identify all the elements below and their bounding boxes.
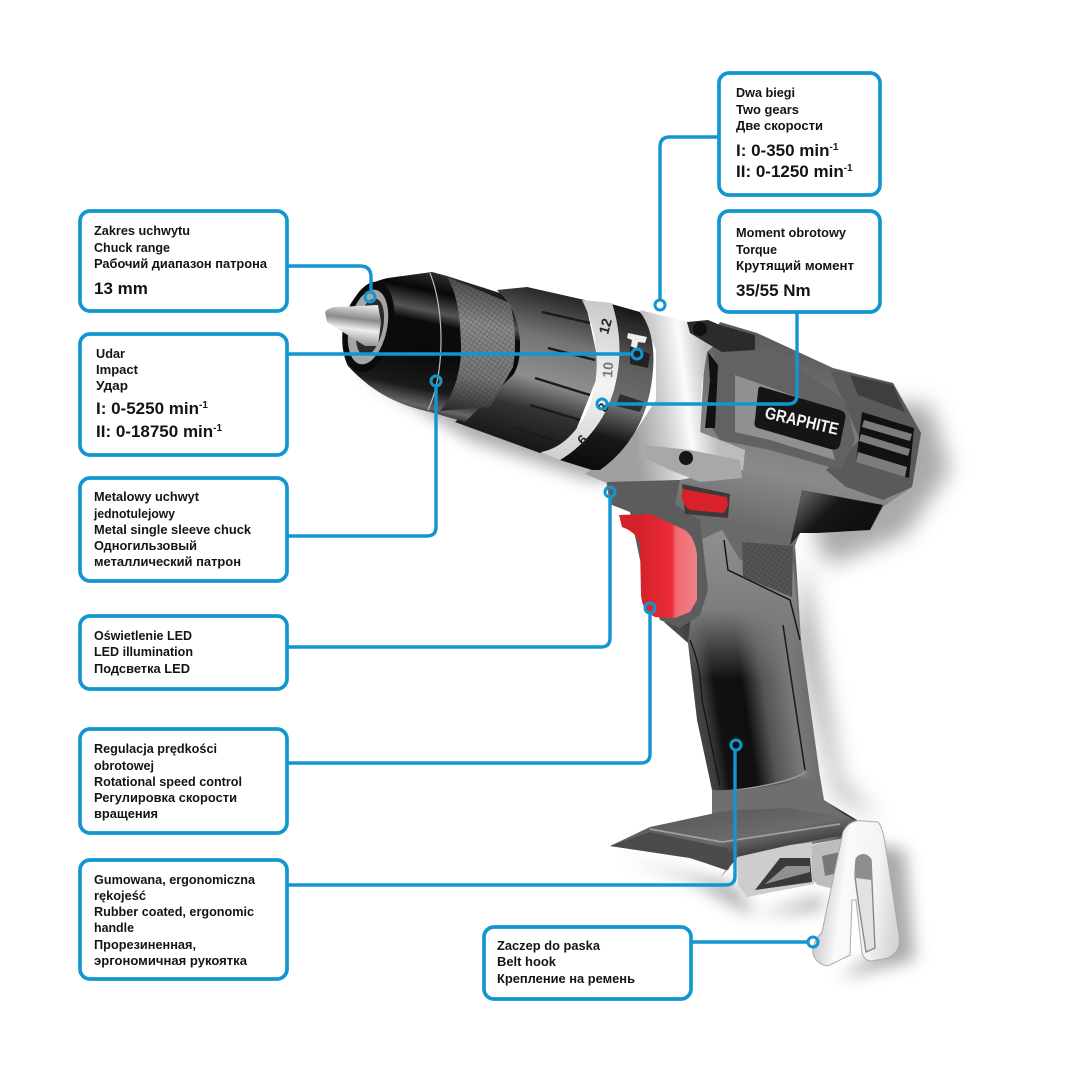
logo: GRAPHITE: [763, 403, 840, 439]
panel: impact: -1: [199, 400, 208, 411]
connector: torque: [607, 312, 797, 404]
panel: speed control: Regulacja prędkości: [94, 741, 217, 756]
panel: impact: Impact: [96, 362, 139, 377]
connector: handle: [287, 751, 735, 885]
second collar: [560, 303, 653, 470]
T mark and slots: [616, 333, 650, 412]
ring numbers: 6: [574, 431, 591, 448]
chuck: [342, 272, 520, 422]
panel: torque: Крутящий момент: [736, 258, 854, 273]
lower screw mount: [645, 445, 742, 482]
upper screw mount: [687, 320, 755, 352]
panel: two gears: -1: [844, 163, 853, 174]
panel: torque: Torque: [736, 242, 777, 257]
panel: impact: Удар: [96, 378, 128, 393]
panel: two gears: Две скорости: [736, 118, 823, 133]
panel: LED illumination: [80, 616, 287, 689]
panel: two gears: II: 0-1250 min: [736, 162, 844, 181]
panel: impact: Udar: [96, 346, 125, 361]
panel: ergonomic handle: Прорезиненная,: [94, 937, 196, 952]
panel: belt hook: [484, 927, 691, 999]
connector: metal chuck: [287, 386, 436, 536]
hook slot: [855, 855, 875, 952]
panel: speed control: Регулировка скорости: [94, 790, 237, 805]
panel: LED illumination: LED illumination: [94, 644, 193, 659]
silver housing: [585, 310, 745, 483]
belt hook: [813, 821, 899, 966]
panel: impact: II: 0-18750 min: [96, 422, 213, 441]
drill bit: [325, 305, 381, 346]
grip texture: [742, 542, 793, 597]
connector: speed control: [287, 613, 650, 763]
connector: LED: [287, 497, 610, 647]
battery base: [610, 808, 857, 878]
panel: ergonomic handle: rękojeść: [94, 888, 146, 903]
panel: belt hook: Belt hook: [497, 954, 557, 969]
panel: chuck range: 13 mm: [94, 279, 148, 298]
panel: two gears: Two gears: [736, 102, 799, 117]
rear dark section: [790, 490, 883, 545]
knurled grip: [440, 277, 515, 411]
upper handle: [688, 530, 807, 680]
panel: ergonomic handle: Rubber coated, ergonomic: [94, 904, 254, 919]
vents: [856, 412, 914, 478]
panel: speed control: [80, 729, 287, 833]
drill shadow: [360, 372, 950, 978]
handle collar: [712, 776, 857, 838]
ring numbers: [574, 316, 616, 448]
panel: speed control: вращения: [94, 806, 158, 821]
panel: ergonomic handle: [80, 860, 287, 979]
panel: chuck range: Chuck range: [94, 240, 170, 255]
connector: impact: [287, 352, 632, 356]
panel: LED illumination: Oświetlenie LED: [94, 628, 192, 643]
panel: chuck range: [80, 211, 287, 311]
panel: metal sleeve chuck: jednotulejowy: [93, 506, 176, 521]
trigger: [619, 514, 697, 618]
panel: torque: 35/55 Nm: [736, 281, 811, 300]
panel: two gears: -1: [830, 142, 839, 153]
panel: chuck range: Zakres uchwytu: [94, 223, 190, 238]
panel: torque: Moment obrotowy: [736, 225, 847, 240]
connector: two gears: [660, 137, 719, 300]
panel: ergonomic handle: эргономичная рукоятка: [94, 953, 248, 968]
panel: torque: [719, 211, 880, 312]
ring numbers: 12: [595, 316, 615, 336]
panel: metal sleeve chuck: Metalowy uchwyt: [94, 489, 200, 504]
main body: [606, 322, 921, 622]
panel: speed control: Rotational speed control: [94, 774, 242, 789]
badge: [754, 387, 845, 450]
handle lines: [690, 540, 806, 792]
side panel: [710, 340, 855, 470]
panel: ergonomic handle: handle: [94, 920, 134, 935]
ring numbers: 8: [594, 400, 612, 414]
panel: metal sleeve chuck: Metal single sleeve chuck: [94, 522, 252, 537]
panel: two gears: [719, 73, 880, 195]
panel: metal sleeve chuck: металлический патрон: [94, 554, 241, 569]
red button: [682, 489, 728, 513]
panel: belt hook: Zaczep do paska: [497, 938, 601, 953]
base chevron: [755, 858, 812, 890]
panel: speed control: obrotowej: [94, 758, 154, 773]
chuck face: [336, 277, 402, 377]
panel: impact: I: 0-5250 min: [96, 399, 199, 418]
panel: ergonomic handle: Gumowana, ergonomiczna: [94, 872, 256, 887]
panel: two gears: Dwa biegi: [736, 85, 795, 100]
handle: [664, 545, 857, 858]
connector: chuck range: [287, 266, 371, 292]
trigger housing: [607, 480, 708, 628]
panel: metal sleeve chuck: [80, 478, 287, 581]
panel: metal sleeve chuck: Одногильзовый: [94, 538, 197, 553]
panel: impact: [80, 334, 287, 455]
ring numbers: 10: [599, 361, 616, 378]
panel: belt hook: Крепление на ремень: [497, 971, 635, 986]
cordless drill illustration: [325, 272, 921, 966]
connector: belt hook: [691, 940, 808, 944]
panel: impact: -1: [213, 423, 223, 434]
belt clip bracket: [812, 838, 848, 888]
gear collar: [455, 287, 600, 453]
panel: chuck range: Рабочий диапазон патрона: [94, 256, 268, 271]
silver ring: [541, 300, 620, 460]
panel: LED illumination: Подсветка LED: [94, 661, 190, 676]
panel: two gears: I: 0-350 min: [736, 141, 830, 160]
